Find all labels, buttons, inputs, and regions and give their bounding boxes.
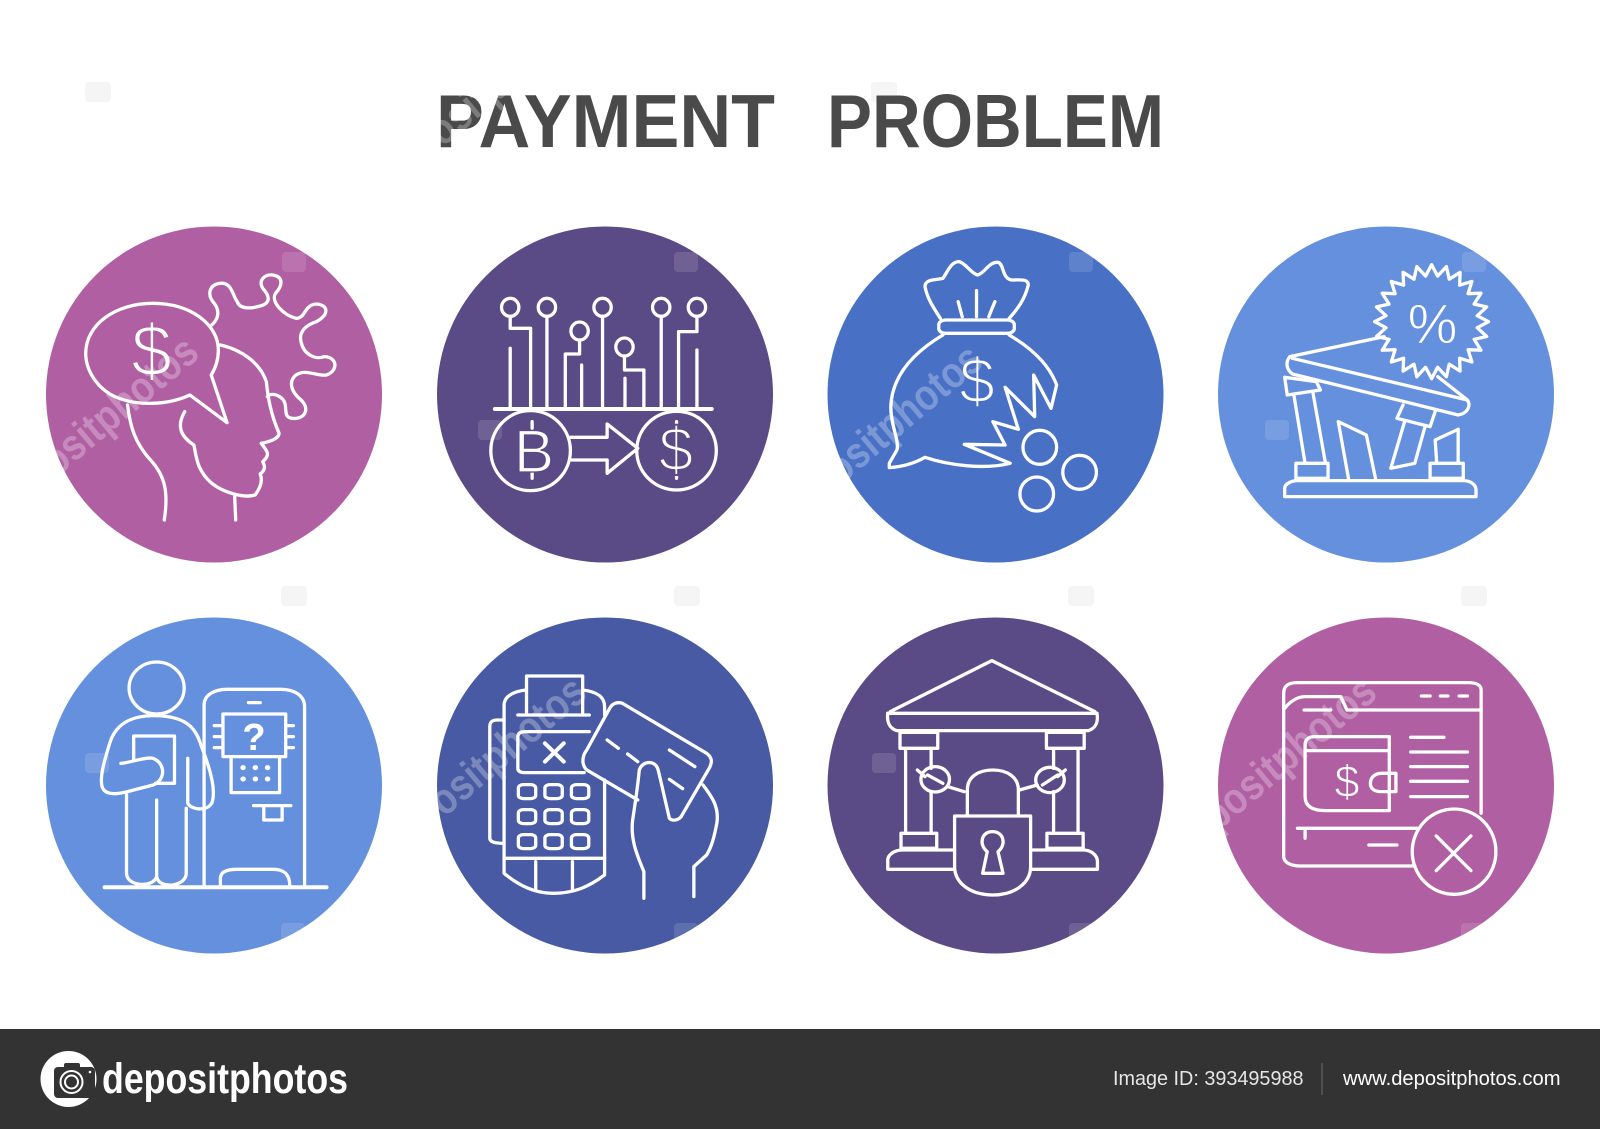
panel: wallet payment failed window (1218, 618, 1554, 954)
watermark camera marks on circles (85, 252, 1486, 943)
divider (1322, 1063, 1323, 1095)
panel: torn money bag (828, 226, 1164, 562)
panel: head with speech bubble and virus (46, 226, 382, 562)
icon: browser window with wallet and cross: $ (1334, 756, 1360, 807)
icon: depositphotos camera logo (40, 1051, 96, 1107)
icon: collapsing bank and percent badge (1285, 265, 1489, 497)
icon: browser window with wallet and cross (1284, 683, 1496, 894)
panel: person at kiosk (46, 618, 382, 954)
watermark overlay (0, 0, 1386, 868)
watermark overlay: depositphotos (369, 666, 596, 868)
icon: bank locked with chain and padlock (888, 661, 1097, 895)
title: PAYMENT (436, 79, 775, 163)
icon: person with tablet at payment kiosk (101, 662, 327, 887)
title (436, 79, 1164, 163)
website url: www.depositphotos.com (1342, 1068, 1560, 1090)
icon: person with tablet at payment kiosk: ? (242, 717, 266, 759)
panel: card terminal declined (437, 618, 773, 954)
icon: POS terminal with card in hand (490, 676, 717, 898)
watermark overlay: depositphotos (765, 334, 992, 536)
icon: circuit board with bitcoin to dollar arrow: B (514, 418, 554, 485)
icon: circuit board with bitcoin to dollar arrow: $ (659, 416, 693, 485)
icon: head, virus and dollar bubble (86, 275, 335, 520)
footer bar (0, 1029, 1600, 1129)
panel: chained bank with padlock (828, 618, 1164, 954)
logo wordmark: depositphotos (102, 1055, 348, 1103)
icon: torn money bag with coins (889, 262, 1096, 511)
watermark overlay: depositphotos (1159, 666, 1386, 868)
panel: collapsing bank with percent badge (1218, 226, 1554, 562)
icon: collapsing bank and percent badge: % (1408, 292, 1457, 355)
panel: bitcoin to dollar circuit (437, 226, 773, 562)
title: PROBLEM (827, 79, 1164, 163)
watermark camera marks on background (85, 82, 1487, 606)
icon: head, virus and dollar bubble: $ (131, 311, 172, 392)
icon: torn money bag with coins: $ (959, 345, 995, 417)
image id: Image ID: 393495988 (1113, 1068, 1304, 1090)
icon: circuit board with bitcoin to dollar arrow (491, 298, 716, 491)
